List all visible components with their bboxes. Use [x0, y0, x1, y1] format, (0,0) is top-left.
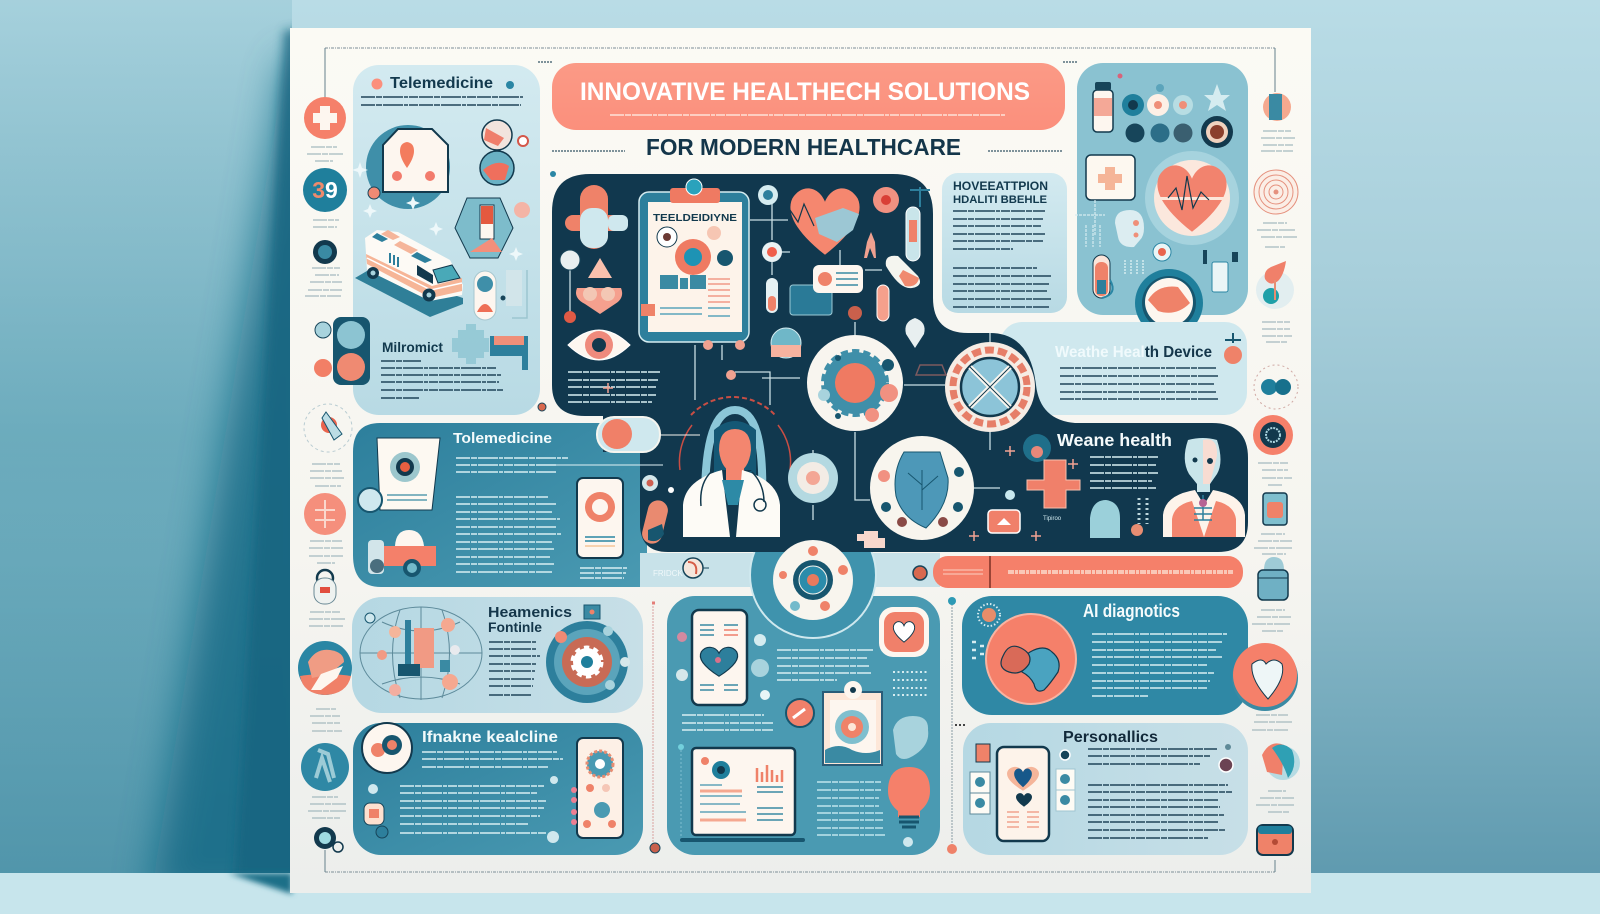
panel: central dark hub [552, 174, 1248, 552]
caption lines [309, 541, 343, 563]
connector from telemedicine text [556, 464, 663, 466]
wearable device text lines [1060, 368, 1218, 399]
left column icons and captions [298, 97, 352, 852]
band: lower connector strip [640, 553, 940, 587]
icon: sparkles [352, 162, 523, 261]
panel: coral caption bar [913, 556, 1243, 588]
icon: teal figure circle [301, 743, 349, 791]
caption lines [308, 797, 346, 818]
caption lines [1252, 610, 1291, 631]
dotted timelines [650, 597, 957, 854]
big central circle [773, 540, 853, 620]
icon: cloud shapes [893, 716, 928, 759]
icon: large hand care circle [298, 641, 352, 695]
icon: nodes [703, 185, 832, 380]
heamenics heading: Fontinle [488, 619, 542, 635]
icon: coral heart callout [1232, 643, 1298, 711]
subtitle line [610, 114, 1005, 116]
icon: coral diagnostic disc [986, 614, 1076, 704]
panel: personalics [963, 723, 1248, 855]
icon: video consultation monitor [366, 125, 450, 209]
lower text lines [817, 782, 885, 835]
telemedicine intro text lines [361, 97, 523, 105]
app text lines [456, 458, 568, 572]
pale pill with coral disc [597, 417, 700, 452]
card heading: HOVEEATTPION [953, 179, 1048, 193]
icon: heart phone [692, 610, 747, 705]
icon: drop [1256, 261, 1294, 309]
small decorative dots [538, 171, 965, 725]
icon: coral round badge [786, 699, 814, 727]
heamenics heading [488, 604, 572, 635]
icon: number badge [303, 168, 347, 212]
icon: dark dial [313, 240, 337, 264]
personalics text lines [1088, 749, 1232, 838]
icon: small dots around phone [676, 632, 770, 840]
panel: title banner [552, 63, 1065, 130]
icon: glow nodes and plus marks [603, 383, 1078, 548]
personalics heading: Personallics [1063, 729, 1158, 746]
body text lines [381, 361, 503, 398]
icon: ambulance [355, 230, 463, 317]
panel: hoveeattion text card [942, 173, 1067, 313]
teal ring behind central circle [750, 512, 876, 638]
heading: wearable health: Weane health [1057, 430, 1172, 450]
wearable text lines [1090, 457, 1158, 488]
icon: globe network [360, 607, 482, 700]
connector lines [570, 200, 1000, 520]
dark panel text lines [568, 372, 660, 402]
right column icons and captions [1252, 93, 1300, 855]
panel: AI diagnostics [962, 596, 1248, 715]
wearable device heading: Weathe Health Device [1055, 344, 1212, 361]
icon: circle grid [1118, 74, 1233, 148]
poster board [290, 28, 1311, 893]
caption lines [1262, 322, 1292, 342]
icon: warning and lips [560, 250, 622, 323]
icon: gear dial [546, 605, 630, 703]
icon: skull scan [1075, 200, 1144, 247]
icon: heart with pulse [1145, 151, 1239, 245]
icon: medical cross pill [565, 185, 628, 249]
phone caption lines [580, 568, 628, 578]
icon: split circle [1263, 93, 1291, 121]
icon: coral clock badge [1253, 415, 1293, 455]
icon: wave and bracket device [452, 324, 528, 370]
icon: dual teal dots [1254, 365, 1298, 409]
app text lines [682, 650, 873, 730]
caption lines [1258, 463, 1292, 485]
icon: head profile [1262, 743, 1300, 780]
icon: strip badge [683, 558, 709, 578]
icon: coral disc [304, 493, 346, 535]
caption lines [313, 220, 339, 227]
icon: phone with mandala [571, 738, 623, 838]
caption lines [310, 464, 344, 486]
icon: magnifier [314, 827, 343, 852]
subheading: Milromict [382, 339, 443, 355]
card text lines [953, 211, 1051, 307]
icon: medicine bottle [1093, 82, 1113, 132]
icon: gear circle [807, 335, 903, 431]
icon: small ring [916, 365, 946, 375]
icon: report document [358, 438, 440, 512]
card heading [953, 179, 1048, 206]
panel: mobile health apps [667, 596, 940, 855]
dotted frame [325, 48, 1275, 872]
icon: wearable badge [1224, 333, 1242, 364]
icon: dot matrix [893, 672, 927, 695]
card heading: HDALITI BBEHLE [953, 194, 1047, 206]
icon: eye [568, 330, 630, 360]
panel: top-right medical icons [1075, 63, 1248, 337]
icon: crossed circle [945, 342, 1035, 432]
icon: dashed composite [304, 404, 352, 452]
icon: coral heart tile [879, 607, 929, 657]
icon: report tablet [680, 748, 805, 842]
panel: wearable health device [1000, 322, 1247, 415]
icon: pendant lock [314, 570, 336, 604]
telemedicine heading: Telemedicine [390, 75, 493, 92]
icon: small medical circle [788, 453, 838, 503]
icon: heart phone [997, 747, 1049, 841]
caption lines [305, 268, 342, 296]
icon: dark monitor device [314, 317, 370, 385]
heamenics heading: Heamenics [488, 604, 572, 621]
icon: capsule and device [474, 270, 527, 320]
icon: concentric rings [1254, 170, 1298, 214]
icon: phone [577, 478, 623, 558]
icon: head scan [1090, 498, 1147, 538]
imakne text lines [400, 752, 563, 833]
icon: pouch [1258, 557, 1288, 600]
icon: calendar [1257, 825, 1293, 855]
icon: anatomical heart circle [870, 436, 974, 540]
icon: doctor figure [679, 397, 791, 537]
icon: sun badge [972, 604, 1000, 658]
icon: coral card [988, 510, 1020, 533]
icon: clipboard report [639, 179, 749, 342]
icon: side tiles [970, 744, 1233, 814]
caption lines [1252, 715, 1292, 730]
icon: medical truck [368, 530, 436, 577]
icon: vials and pills [813, 187, 930, 348]
caption lines [307, 147, 343, 161]
panel: telemedicine app [353, 423, 647, 587]
panel: heamenics [352, 597, 643, 713]
caption lines [1261, 131, 1295, 151]
icon: light bulb [888, 767, 930, 847]
caption lines [1256, 791, 1294, 812]
icon: coral plus [1027, 460, 1080, 508]
icon: small parts [364, 776, 559, 843]
icon: round lens button [1135, 269, 1203, 337]
caption lines [1257, 223, 1297, 247]
app heading: Tolemedicine [453, 430, 552, 447]
icon: thermometer [1093, 255, 1143, 298]
main title: INNOVATIVE HEALTHECH SOLUTIONS [580, 78, 1030, 106]
clipboard heading: TEELDEIDIYNE [653, 213, 737, 224]
icon: clinical badges [480, 120, 528, 185]
subtitle heading: FOR MODERN HEALTHCARE [646, 134, 961, 160]
icon: number badge: 39 [312, 177, 338, 203]
heamenics text lines [489, 642, 540, 695]
icon: coral capsule [640, 475, 674, 546]
caption lines [1254, 534, 1292, 554]
AI text lines [1092, 634, 1227, 696]
caption lines [310, 709, 342, 731]
icon: heart [790, 188, 860, 255]
icon: medical frame [823, 681, 882, 765]
icon: tablet [1263, 493, 1287, 525]
icon: small diagnostic parts [1153, 243, 1238, 292]
icon: hexagon device [455, 198, 530, 258]
panel: imakne healthcare [353, 723, 643, 855]
icon: first-aid square [1086, 155, 1135, 200]
icon: coral cross [304, 97, 346, 139]
strip label: FRIDCK [653, 569, 683, 578]
icon: white heart badge [362, 723, 412, 773]
caption lines [309, 612, 345, 626]
imakne heading: Ifnakne kealcline [422, 729, 558, 746]
icon: body scan figure [1163, 438, 1245, 537]
AI heading: AI diagnotics [1083, 601, 1180, 621]
small caption: Tipiroo [1043, 516, 1062, 522]
panel: telemedicine [314, 65, 540, 415]
